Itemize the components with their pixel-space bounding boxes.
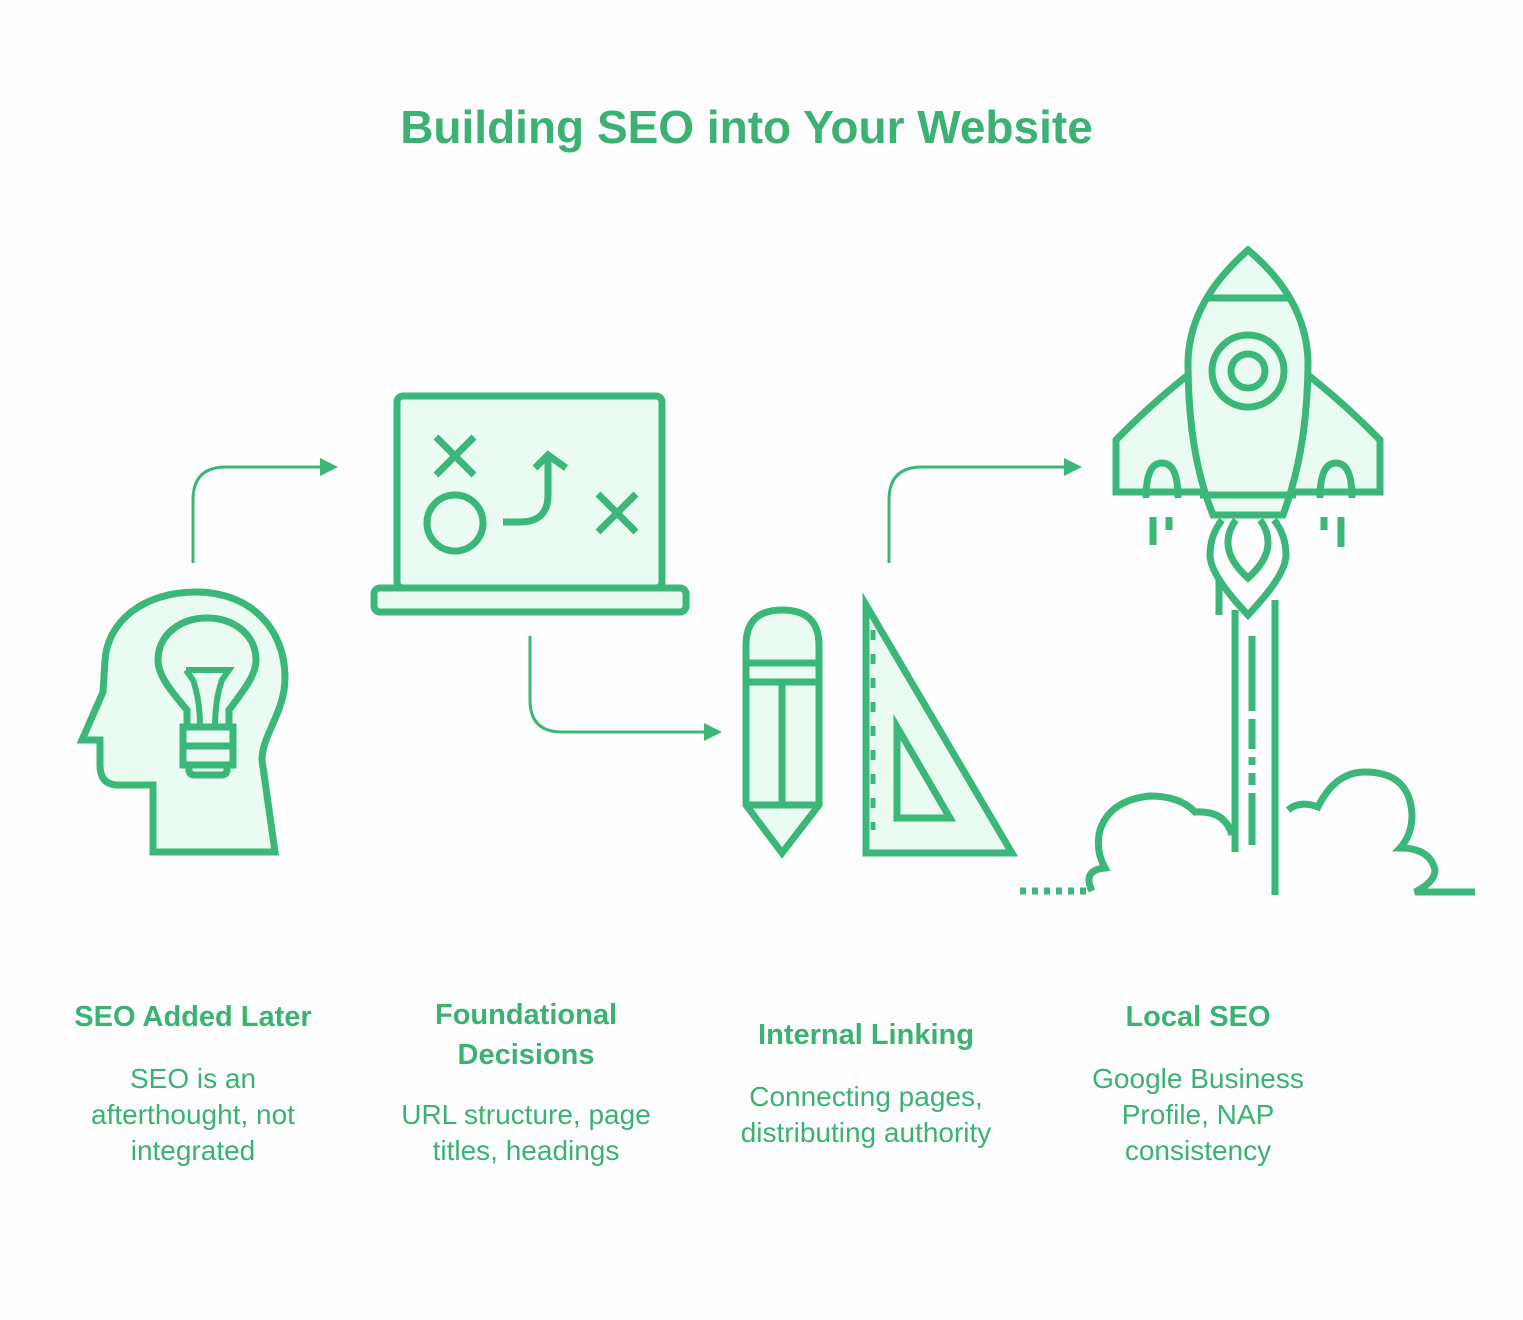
step 3 text: Internal Linking bbox=[758, 1019, 974, 1051]
title: Building SEO into Your Website bbox=[400, 101, 1093, 153]
step 1 text: SEO is an bbox=[130, 1063, 256, 1094]
step 4 text: consistency bbox=[1125, 1135, 1271, 1166]
icon: rocket launch bbox=[1020, 250, 1475, 895]
arrow 1 bbox=[193, 458, 338, 563]
step 1 text bbox=[74, 1001, 312, 1166]
step 3 text: distributing authority bbox=[741, 1117, 991, 1148]
step 1 text: integrated bbox=[131, 1135, 255, 1166]
step 1 text: afterthought, not bbox=[91, 1099, 295, 1130]
step 4 text: Google Business bbox=[1092, 1063, 1304, 1094]
icon: laptop strategy bbox=[374, 396, 686, 612]
arrow 2 bbox=[530, 636, 722, 741]
step 2 text: Foundational bbox=[435, 999, 617, 1031]
arrow 3 bbox=[889, 458, 1082, 563]
step 2 text bbox=[401, 999, 651, 1166]
step 1 text: SEO Added Later bbox=[74, 1001, 312, 1033]
step 3 text bbox=[741, 1019, 992, 1148]
step 3 text: Connecting pages, bbox=[749, 1081, 983, 1112]
step 4 text bbox=[1092, 1001, 1304, 1166]
step 4 text: Local SEO bbox=[1125, 1001, 1271, 1033]
step 2 text: titles, headings bbox=[433, 1135, 619, 1166]
icon: pencil and ruler bbox=[746, 605, 1012, 853]
step 4 text: Profile, NAP bbox=[1122, 1099, 1274, 1130]
step 2 text: Decisions bbox=[458, 1039, 594, 1071]
step 2 text: URL structure, page bbox=[401, 1099, 651, 1130]
icon: head with lightbulb bbox=[82, 592, 285, 852]
